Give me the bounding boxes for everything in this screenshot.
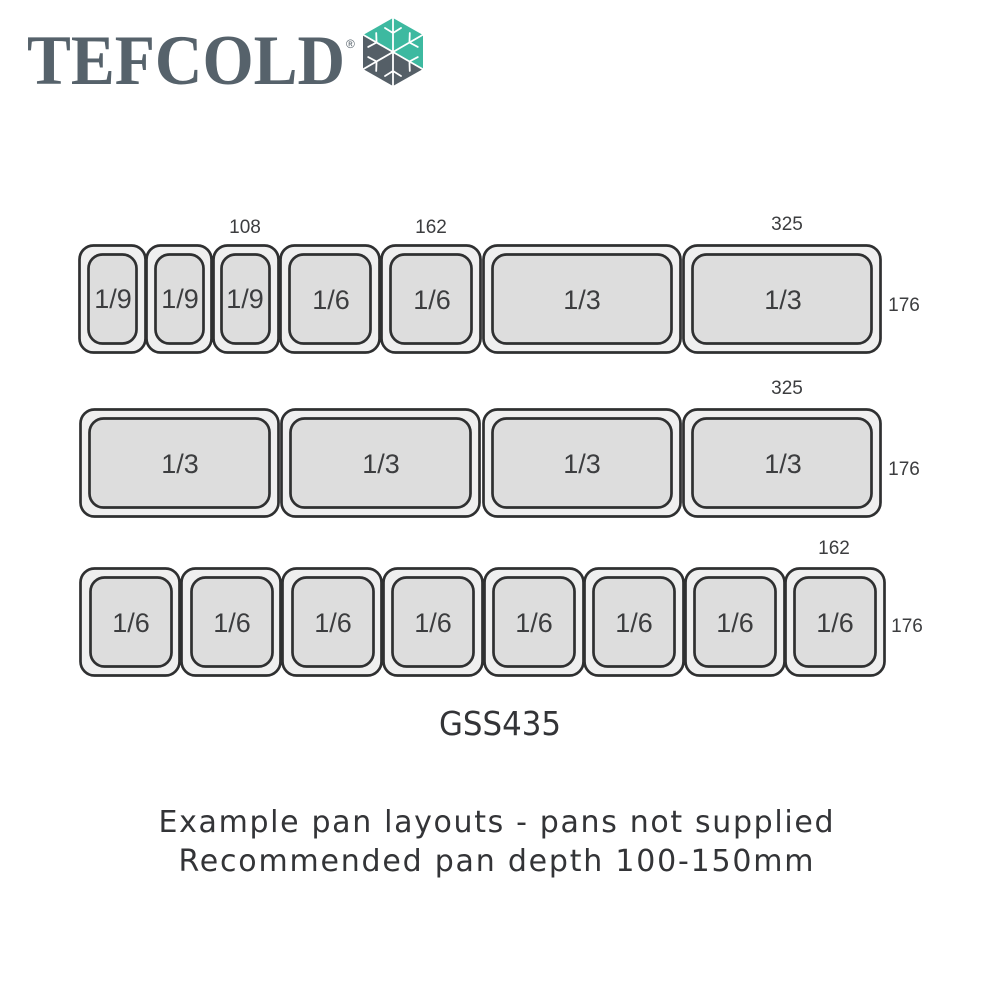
pan 1/3: 1/3 bbox=[764, 449, 802, 479]
pan 1/3 bbox=[484, 246, 680, 352]
pan 1/9: 1/9 bbox=[161, 284, 199, 314]
pan 1/9: 1/9 bbox=[94, 284, 132, 314]
pan 1/3: 1/3 bbox=[563, 449, 601, 479]
pan 1/3 bbox=[684, 410, 880, 516]
pan 1/6 bbox=[282, 568, 382, 676]
pan 1/9 bbox=[146, 246, 212, 352]
pan 1/6: 1/6 bbox=[515, 608, 553, 638]
icon: snowflake hexagon bbox=[360, 18, 426, 86]
pan 1/3 bbox=[282, 410, 480, 516]
row 2: four 1/3 pans bbox=[80, 378, 920, 516]
pan 1/6 bbox=[584, 568, 684, 676]
pan 1/9 bbox=[80, 246, 146, 352]
pan 1/3 bbox=[684, 246, 880, 352]
pan 1/3 bbox=[484, 410, 680, 516]
pan 1/6 bbox=[484, 568, 584, 676]
dimension: 325: 325 bbox=[771, 214, 803, 235]
dimension: 162: 162 bbox=[818, 538, 850, 559]
pan 1/3: 1/3 bbox=[563, 285, 601, 315]
logo wordmark: TEFCOLD bbox=[27, 22, 345, 100]
pan 1/6: 1/6 bbox=[716, 608, 754, 638]
pan 1/6 bbox=[80, 568, 180, 676]
pan 1/6 bbox=[280, 246, 380, 352]
dimension: 176: 176 bbox=[888, 295, 920, 316]
model name: GSS435 bbox=[439, 704, 561, 743]
dimension: 108: 108 bbox=[229, 217, 261, 238]
pan 1/6: 1/6 bbox=[314, 608, 352, 638]
pan 1/3: 1/3 bbox=[764, 285, 802, 315]
pan 1/6 bbox=[686, 568, 784, 676]
dimension: 176: 176 bbox=[891, 616, 923, 637]
pan 1/9 bbox=[214, 246, 278, 352]
pan 1/9: 1/9 bbox=[226, 284, 264, 314]
pan 1/6: 1/6 bbox=[414, 608, 452, 638]
pan 1/6: 1/6 bbox=[312, 285, 350, 315]
caption: pans not supplied: Example pan layouts - pans not supplied bbox=[158, 805, 834, 840]
row 1: mixed pan layout bbox=[80, 214, 920, 352]
pan 1/3 bbox=[80, 410, 278, 516]
pan 1/3: 1/3 bbox=[161, 449, 199, 479]
pan 1/6: 1/6 bbox=[213, 608, 251, 638]
pan 1/6: 1/6 bbox=[816, 608, 854, 638]
pan 1/6 bbox=[384, 568, 482, 676]
logo: Tefcold bbox=[27, 18, 426, 100]
pan 1/6: 1/6 bbox=[615, 608, 653, 638]
row 3: eight 1/6 pans bbox=[80, 538, 923, 676]
registered mark: ® bbox=[346, 37, 355, 51]
dimension: 325: 325 bbox=[771, 378, 803, 399]
dimension: 176: 176 bbox=[888, 459, 920, 480]
dimension: 162: 162 bbox=[415, 217, 447, 238]
pan 1/6 bbox=[182, 568, 280, 676]
pan 1/6: 1/6 bbox=[413, 285, 451, 315]
pan 1/3: 1/3 bbox=[362, 449, 400, 479]
pan 1/6 bbox=[382, 246, 480, 352]
caption: recommended depth: Recommended pan depth 100-150mm bbox=[178, 844, 814, 879]
pan 1/6 bbox=[786, 568, 884, 676]
pan 1/6: 1/6 bbox=[112, 608, 150, 638]
